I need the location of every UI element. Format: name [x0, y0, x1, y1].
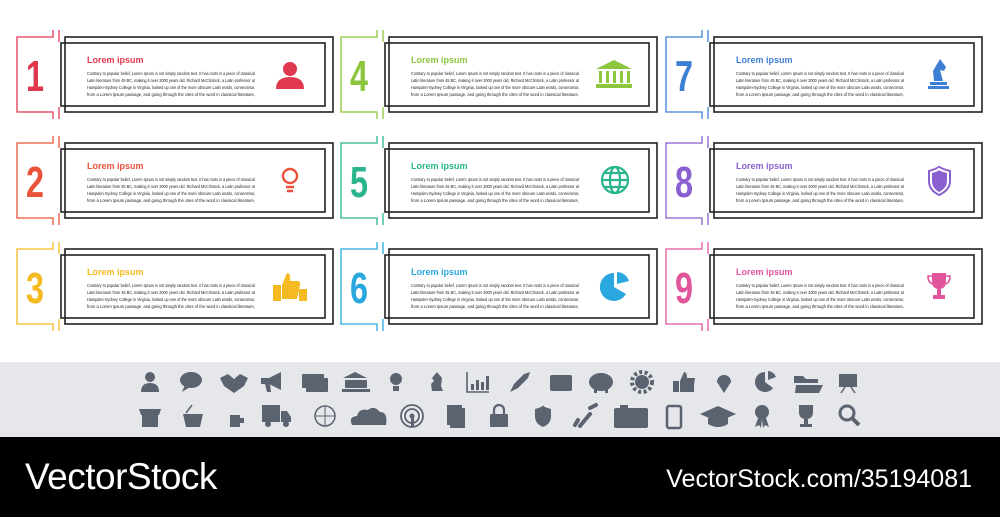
card 9: 9	[675, 264, 693, 313]
row 2 icons	[139, 405, 859, 428]
card 2: Lorem ipsum	[87, 161, 144, 171]
icon band	[0, 362, 1000, 437]
footer	[0, 437, 1000, 517]
footer: VectorStock	[25, 456, 218, 497]
card 6	[341, 242, 657, 331]
card 4: 4	[350, 52, 368, 101]
card 3	[17, 242, 333, 331]
card 1	[17, 30, 333, 119]
card 7: Lorem ipsum	[736, 55, 793, 65]
card 2: 2	[26, 158, 44, 207]
card 7: 7	[675, 52, 693, 101]
card 8	[666, 136, 982, 225]
card 7	[666, 30, 982, 119]
card 4: Lorem ipsum	[411, 55, 468, 65]
card 8: 8	[675, 158, 693, 207]
card 5	[341, 136, 657, 225]
card 4	[341, 30, 657, 119]
card 5: 5	[350, 158, 368, 207]
card 6: Lorem ipsum	[411, 267, 468, 277]
card 9: Lorem ipsum	[736, 267, 793, 277]
card 6: 6	[350, 264, 368, 313]
row 1 icons	[141, 371, 857, 393]
card 3: Lorem ipsum	[87, 267, 144, 277]
card 2	[17, 136, 333, 225]
card 1: 1	[26, 52, 44, 101]
card 8: Lorem ipsum	[736, 161, 793, 171]
card 5: Lorem ipsum	[411, 161, 468, 171]
card 9	[666, 242, 982, 331]
card 1: Lorem ipsum	[87, 55, 144, 65]
footer: VectorStock.com/35194081	[666, 465, 972, 493]
card 3: 3	[26, 264, 44, 313]
